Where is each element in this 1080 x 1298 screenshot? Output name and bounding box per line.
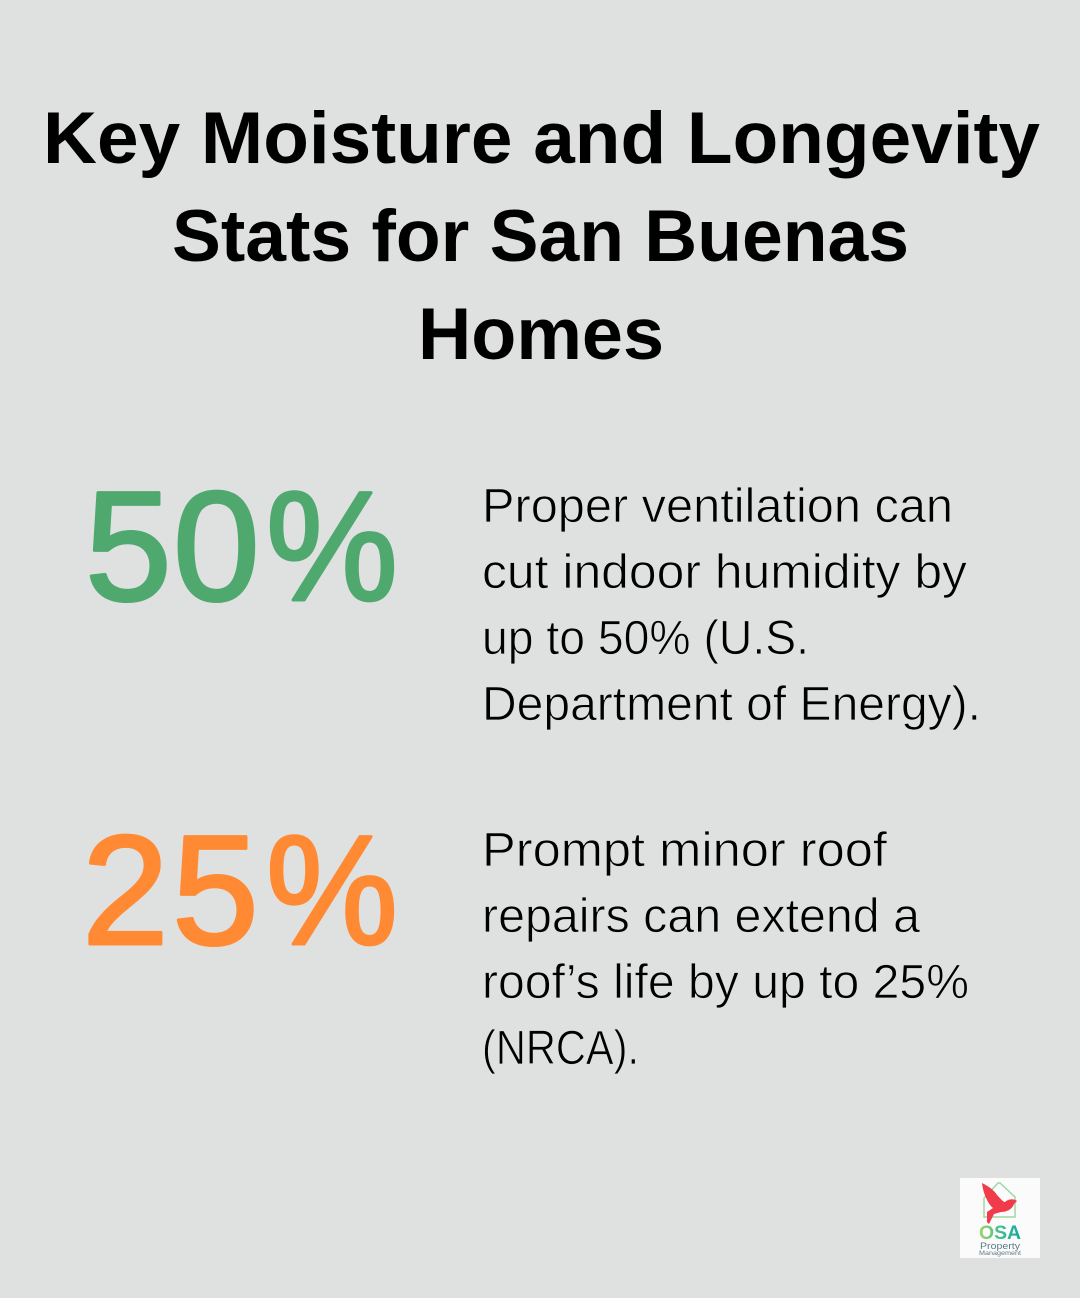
icon: house outline <box>984 1183 1015 1217</box>
text: ventilation stat description <box>482 480 981 731</box>
text: ventilation stat description: up to 50% (U.S. <box>482 612 809 665</box>
stat: 25% <box>82 804 398 978</box>
text: roof repairs stat description: Prompt minor roof <box>482 824 888 877</box>
stat: 50%: % <box>266 460 398 634</box>
stat: 25%: 25 <box>82 804 259 978</box>
logo subtitle second line: Management <box>979 1251 1021 1257</box>
text: ventilation stat description: Proper ventilation can <box>482 480 953 533</box>
title: Key Moisture and Longevity <box>43 98 1040 179</box>
logo wordmark: OSA <box>979 1223 1021 1244</box>
icon: red bird <box>982 1183 1017 1224</box>
title: Stats for San Buenas <box>172 196 909 277</box>
stat: 50% <box>85 460 398 634</box>
text: roof repairs stat description: repairs can extend a <box>482 890 920 943</box>
stat: 25%: % <box>266 804 398 978</box>
logo subtitle: Property <box>980 1241 1020 1252</box>
stat: 50%: 50 <box>85 460 260 634</box>
logo: OSA Property Management <box>960 1178 1040 1258</box>
text: roof repairs stat description: roof’s life by up to 25% <box>482 956 969 1009</box>
text: roof repairs stat description <box>482 824 969 1075</box>
title: Homes <box>418 294 664 375</box>
text: ventilation stat description: Department of Energy). <box>482 678 981 731</box>
title <box>43 98 1040 375</box>
text: roof repairs stat description: (NRCA). <box>482 1022 639 1075</box>
text: ventilation stat description: cut indoor humidity by <box>482 546 967 599</box>
